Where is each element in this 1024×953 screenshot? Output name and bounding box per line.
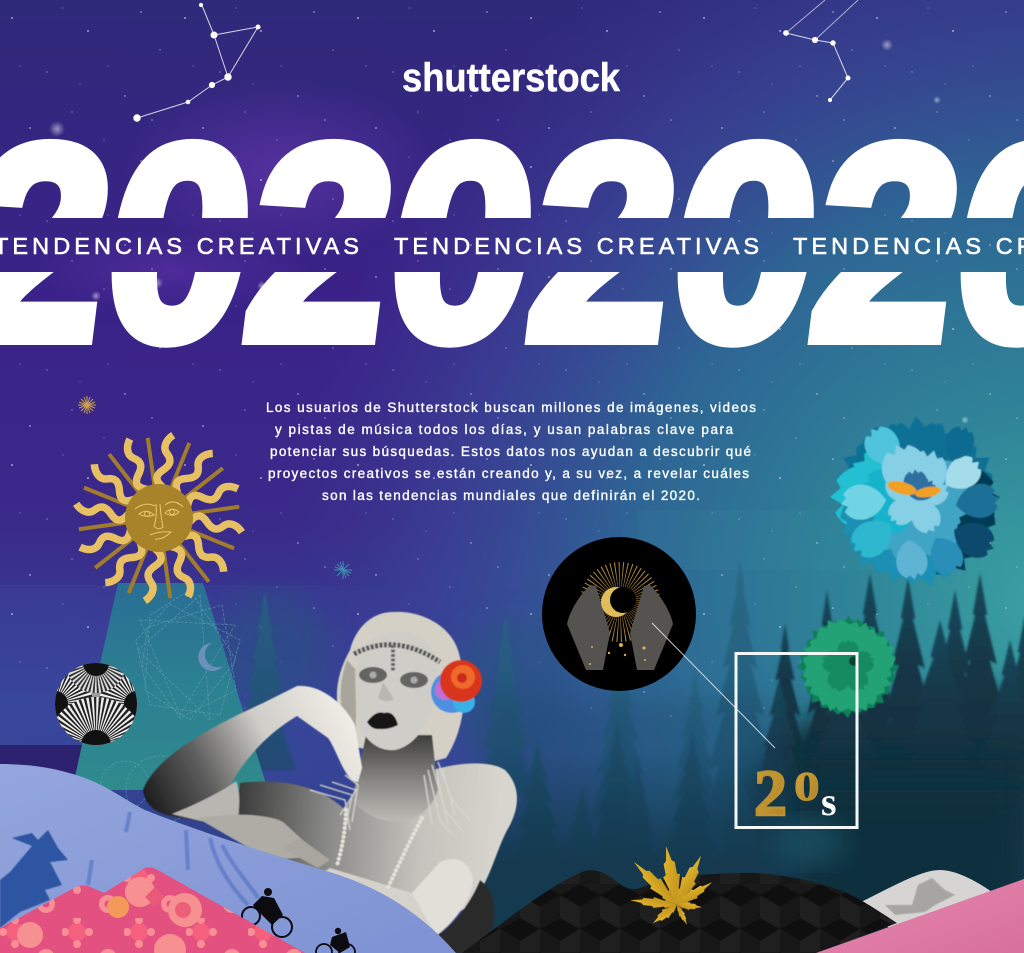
sleeve fold [172, 781, 239, 822]
intro text block: Los usuarios de Shutterstock buscan millones de imágenes, videos [266, 400, 756, 415]
headband [354, 645, 440, 662]
scattered ruffled petals [839, 419, 1002, 582]
forest background [210, 560, 1024, 953]
constellation: right [784, 0, 858, 102]
cyclist small [316, 928, 355, 953]
eyes [359, 667, 428, 688]
icon: large teal peony [827, 410, 1009, 592]
icon: sun with face [75, 434, 243, 602]
constellation: left [134, 3, 260, 121]
lips [367, 712, 398, 729]
connector line from medallion to frame [652, 623, 775, 748]
intro text block: proyectos creativos se están creando y, a su vez, a revelar cuáles [268, 466, 749, 481]
20s label [754, 757, 837, 830]
necklaces [337, 810, 422, 890]
hill: grey engraved landscape [855, 870, 992, 935]
light beam with geometric star pattern [72, 583, 268, 824]
hill: blue landscape [0, 764, 456, 953]
intro text block: son las tendencias mundiales que definirán el 2020. [322, 488, 700, 503]
icon: gold leaf [629, 845, 715, 928]
hill: black cube pattern [462, 870, 897, 953]
dress [436, 880, 494, 953]
gloved arm and hand [143, 686, 362, 822]
hill: pink textured [816, 879, 1024, 953]
dark mass below tree line [730, 690, 1024, 953]
neck [352, 735, 438, 821]
icon: art deco fan circle [55, 663, 137, 745]
20s label: 0 [794, 765, 820, 810]
icon: small teal star burst [334, 561, 352, 579]
subtitle band: tendencias creativas [0, 233, 1024, 259]
hill: pink floral [0, 867, 305, 953]
20s frame [736, 654, 857, 830]
feathers [310, 762, 470, 835]
crescent moon [601, 587, 631, 617]
icon: crescent on beam [198, 643, 223, 671]
icon: green peony [796, 612, 903, 719]
icon: moon and hands medallion [542, 537, 696, 691]
bracelets [282, 838, 330, 868]
right glove [412, 859, 473, 935]
painted tree [0, 830, 68, 928]
rose [431, 660, 482, 713]
woman in flapper portrait [143, 612, 517, 953]
20s label: 2 [754, 757, 787, 830]
icon: orange rosette [107, 896, 129, 918]
intro text block: y pistas de música todos los días, y usan palabras clave para [275, 422, 733, 437]
hands [567, 585, 673, 670]
hair [337, 612, 464, 765]
logo: shutterstock: shutterstock [402, 56, 621, 100]
nose [378, 682, 394, 701]
cyclist [242, 888, 292, 937]
subtitle band: tendencias creativas: TENDENCIAS CREATIVAS [394, 233, 759, 259]
intro text block: potenciar sus búsquedas. Estos datos nos ayudan a descubrir qué [270, 444, 751, 459]
chest and shoulders [235, 763, 517, 950]
icon: small gold star burst [78, 396, 96, 414]
flower centre [886, 478, 942, 499]
subtitle band: tendencias creativas: TENDENCIAS CREATIVAS [0, 233, 359, 259]
intro text block [266, 400, 756, 503]
20s label: s [821, 779, 837, 824]
face [355, 632, 438, 750]
